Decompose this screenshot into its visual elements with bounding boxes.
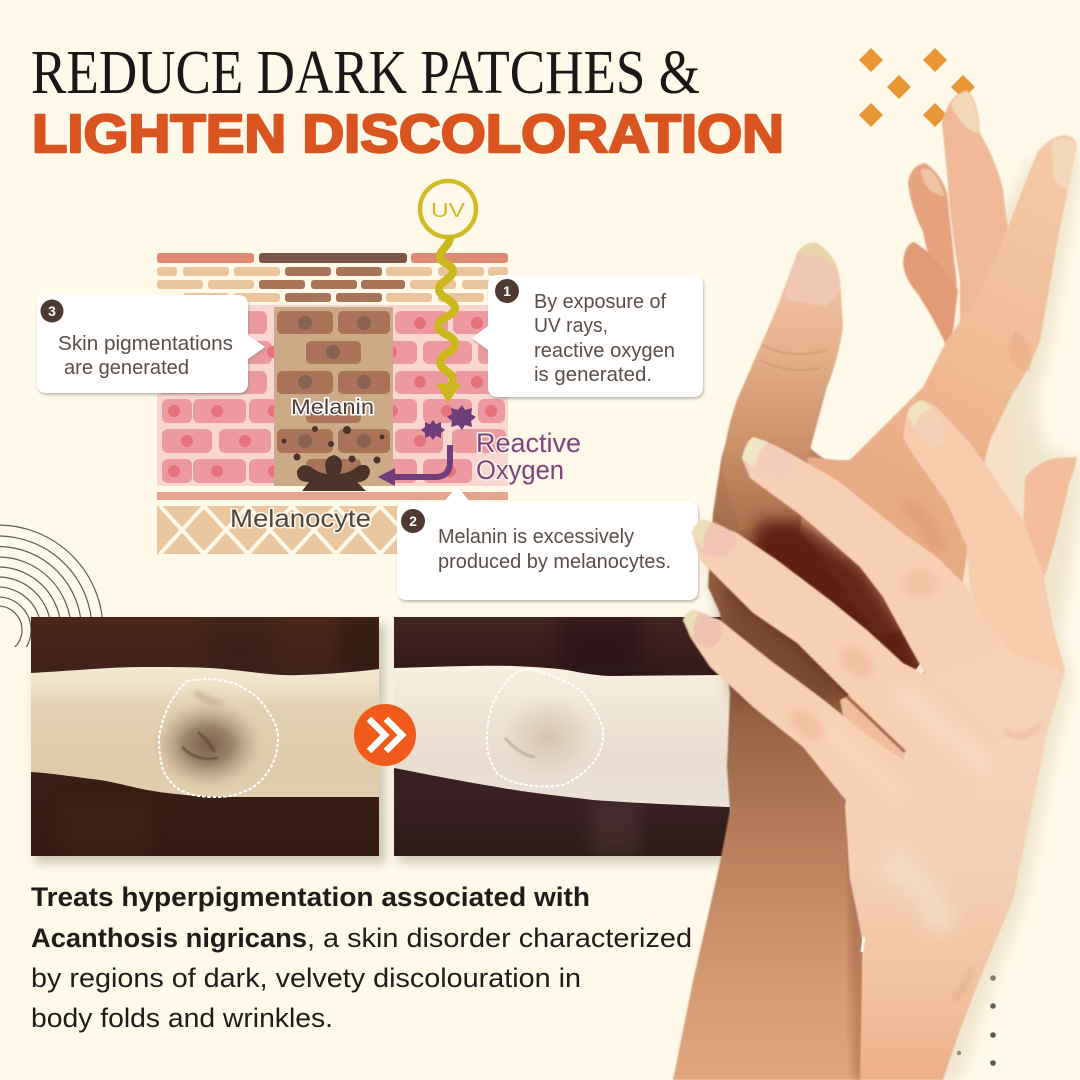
hand shadow xyxy=(930,150,1080,1080)
UV ray arrow xyxy=(436,237,461,403)
callout 1: UV rays, xyxy=(534,314,608,337)
callout 3: are generated xyxy=(64,356,189,379)
right back finger xyxy=(1023,457,1077,590)
stratum corneum layers xyxy=(157,253,508,302)
photo: two hands xyxy=(673,90,1080,1080)
melanocyte lattice layer xyxy=(157,506,424,554)
callout 2: 2 xyxy=(409,513,417,529)
reactive oxygen stars xyxy=(421,405,476,440)
skin underlay below fingers xyxy=(840,665,1000,830)
label: reactive oxygen: Reactive xyxy=(476,428,581,458)
callout 2: produced by melanocytes. xyxy=(438,550,671,573)
UV symbol: UV xyxy=(431,200,466,222)
title: LIGHTEN DISCOLORATION xyxy=(32,104,784,164)
white gap sliver xyxy=(915,660,927,678)
dark gap between hands xyxy=(735,520,925,725)
callout 3: Skin pigmentations xyxy=(58,332,233,355)
palm of back hand xyxy=(930,395,1035,640)
long back finger and palm xyxy=(800,135,1077,640)
pigmented column xyxy=(274,307,393,487)
callout 2: Melanin is excessively xyxy=(438,525,635,548)
callout 3: 3 xyxy=(48,303,56,319)
before-after arrow badge xyxy=(354,704,416,766)
callout 1: By exposure of xyxy=(534,290,666,313)
description text xyxy=(31,882,692,1033)
callout 3 xyxy=(37,295,265,393)
title: REDUCE DARK PATCHES & xyxy=(31,39,700,107)
description text: body folds and wrinkles. xyxy=(31,1003,333,1033)
label: melanocyte: Melanocyte xyxy=(230,505,371,533)
callout 1 xyxy=(472,275,703,397)
melanocyte cell xyxy=(297,455,370,491)
purple arrow xyxy=(378,445,450,486)
decorative concentric arcs xyxy=(0,524,103,647)
back arm xyxy=(673,420,930,1080)
finger B xyxy=(692,519,1000,800)
melanin particles xyxy=(282,426,384,464)
finger D xyxy=(903,400,1065,720)
basal strip xyxy=(157,492,508,500)
description text: by regions of dark, velvety discolouration in xyxy=(31,963,581,993)
UV symbol xyxy=(420,181,476,237)
front hand xyxy=(683,400,1065,1080)
callout 1: is generated. xyxy=(534,363,652,386)
decorative dots xyxy=(957,975,996,1066)
arm crease shading xyxy=(850,800,860,1080)
back of front hand and wrist xyxy=(845,650,1065,1080)
back thumb finger xyxy=(722,243,843,530)
finger A xyxy=(742,437,1030,760)
arm shading under fingers xyxy=(712,545,840,720)
back fingers xyxy=(903,90,1012,345)
epidermis cells xyxy=(157,305,508,487)
finger C xyxy=(683,610,960,860)
skin diagram xyxy=(37,181,703,600)
highlights and knuckles xyxy=(900,690,990,770)
callout 2 xyxy=(397,486,698,600)
label: reactive oxygen: Oxygen xyxy=(476,455,564,485)
label: reactive oxygen xyxy=(476,428,581,485)
description text: Acanthosis nigricans xyxy=(31,923,307,953)
after photo xyxy=(394,617,734,863)
before photo xyxy=(31,617,385,863)
decorative diamonds xyxy=(859,48,975,127)
gap line between fingers xyxy=(838,688,905,752)
callout 1: 1 xyxy=(503,283,511,299)
label: melanin: Melanin xyxy=(291,395,374,419)
description text: Treats hyperpigmentation associated with xyxy=(31,882,590,912)
title xyxy=(31,39,784,164)
description text: , a skin disorder characterized xyxy=(307,923,692,953)
callout 1: reactive oxygen xyxy=(534,339,675,362)
